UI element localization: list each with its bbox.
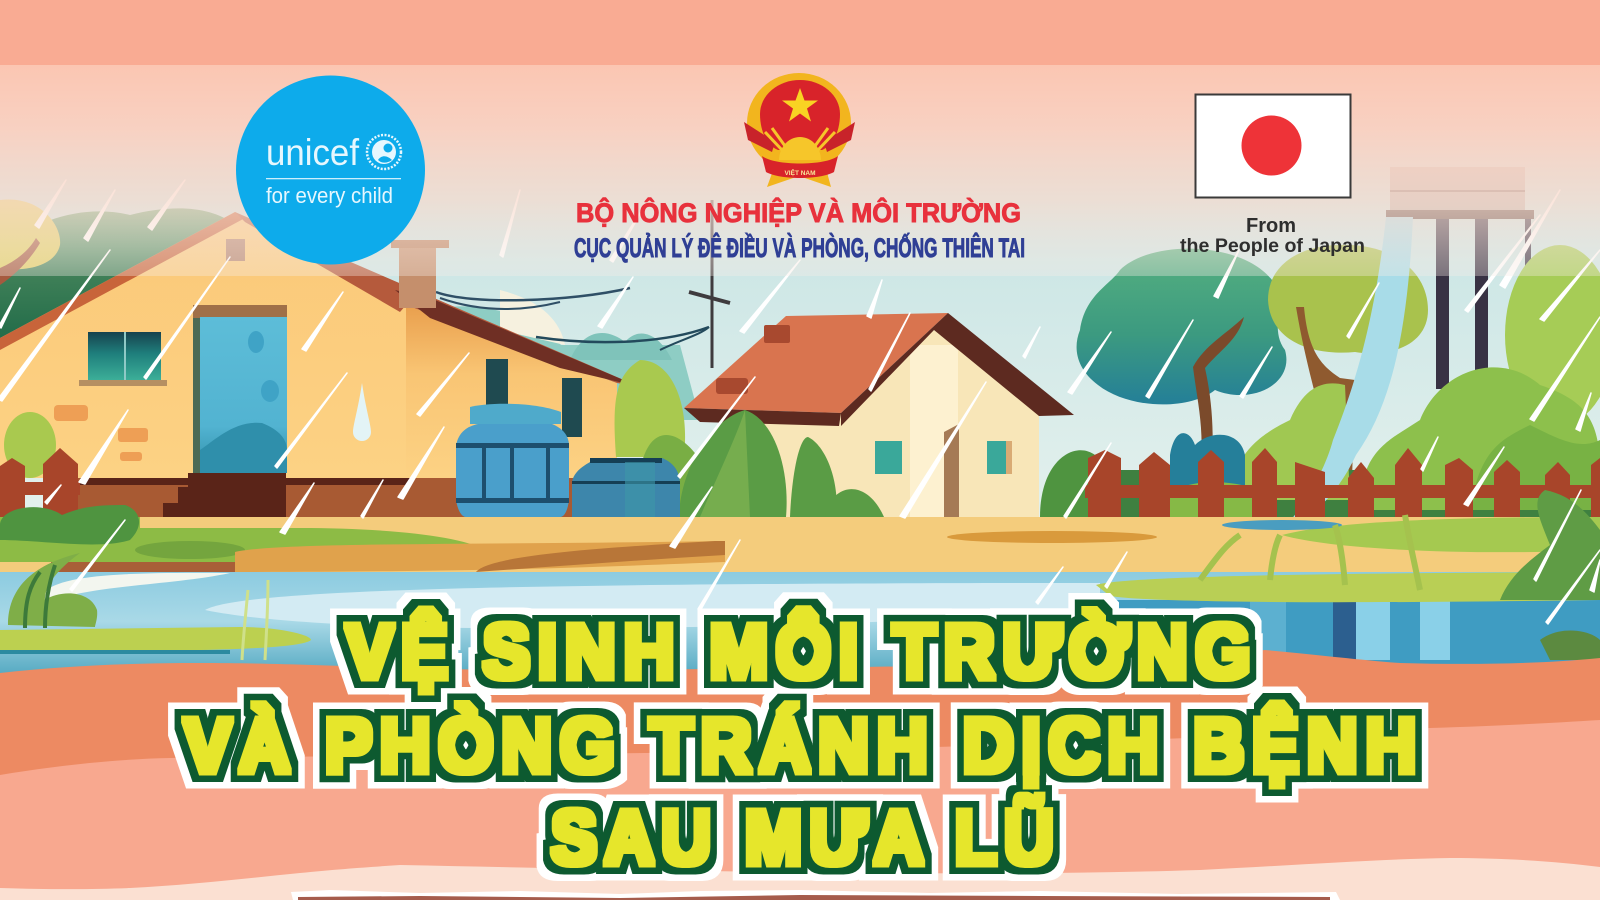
door: [193, 305, 287, 473]
brown ribbon at bottom edge: [291, 890, 1340, 900]
big water drop: [353, 383, 371, 441]
emblem: Vietnam national emblem: [744, 73, 855, 187]
ministry name: BỘ NÔNG NGHIỆP VÀ MÔI TRƯỜNG: [576, 197, 1021, 228]
power pole and wires: [436, 200, 730, 368]
emblem: Vietnam national emblem: VIỆT NAM: [784, 168, 816, 177]
star: [782, 88, 818, 122]
right plants: [1500, 490, 1600, 600]
left fence: [0, 448, 80, 517]
left house: [0, 212, 640, 517]
scene background sky: [0, 65, 1600, 585]
fence right: [1085, 448, 1600, 517]
ground: sand and grass: [0, 505, 1600, 573]
title line 3: SAU MƯA LŨ: [551, 795, 1061, 881]
green bank right: [1096, 572, 1600, 602]
gear: [779, 137, 821, 160]
top peach band: [0, 0, 1600, 65]
flood water: [0, 490, 1600, 682]
translucent header overlay: [0, 65, 1600, 276]
waterfall stream: [1284, 217, 1413, 530]
caption: from the people of Japan: [1180, 215, 1365, 257]
caption: from the people of Japan: From: [1246, 215, 1296, 237]
right foliage bushes: [1040, 245, 1600, 520]
bricks: [54, 405, 88, 421]
department name: CỤC QUẢN LÝ ĐÊ ĐIỀU VÀ PHÒNG, CHỐNG THIÊN TAI: [574, 231, 1025, 263]
tree: yellow green canopy: [1268, 245, 1428, 480]
title line 1: VỆ SINH MÔI TRƯỜNG: [346, 608, 1258, 695]
green bank left: [0, 627, 311, 651]
illustration: flooded village scene: [0, 167, 1600, 682]
steps: [163, 473, 286, 517]
unicef wordmark: unicef: [266, 132, 360, 173]
window: [88, 332, 161, 380]
distant hills left: [0, 199, 235, 345]
icon: unicef emblem: [367, 135, 401, 169]
caption: from the people of Japan: the People of Japan: [1180, 236, 1365, 257]
ribbon: [762, 156, 838, 178]
unicef tagline: for every child: [266, 183, 393, 208]
logo: UNICEF: [236, 76, 425, 264]
base wall: [60, 478, 620, 517]
distant trees behind wires: [430, 306, 700, 420]
chimney: [399, 248, 436, 308]
rain streaks: [0, 180, 1600, 624]
salmon wave bands: [0, 650, 1600, 900]
right house: [684, 313, 1074, 517]
title line 2: VÀ PHÒNG TRÁNH DỊCH BỆNH: [184, 702, 1424, 789]
reeds left: [8, 553, 97, 627]
water tower: [1386, 167, 1534, 389]
side windows: [486, 359, 508, 407]
blue water barrels: [456, 404, 680, 517]
title: [184, 608, 1424, 881]
tree: teal canopy: [1077, 249, 1286, 470]
bushes by the houses: [4, 360, 884, 517]
attic window: [226, 239, 245, 261]
flag: Japan: [1196, 94, 1350, 198]
wheat ears: [765, 128, 835, 150]
